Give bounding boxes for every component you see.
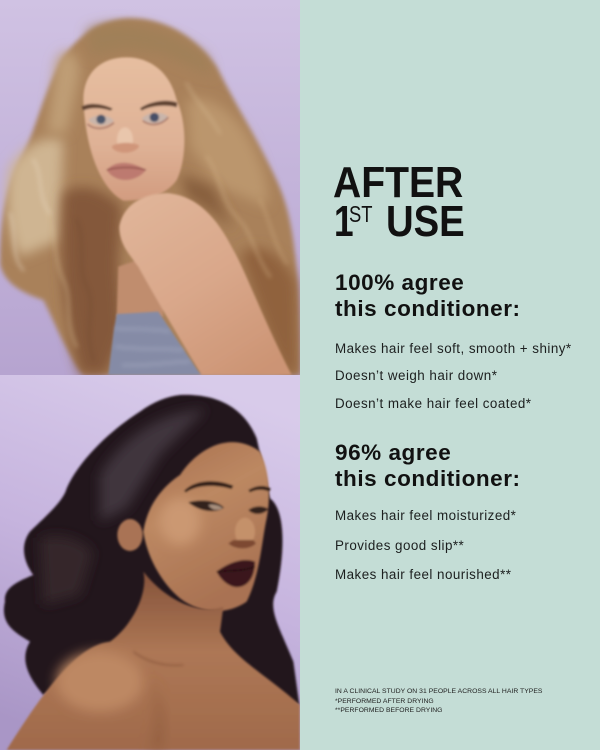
heading: 96% agree: 96% agree [335,440,451,465]
list: 100% agree claims: Makes hair feel soft, smooth + shiny* [335,341,572,356]
dark hair mass [4,395,299,705]
list: 100% agree claims: Doesn’t make hair feel coated* [335,396,531,411]
heading: 100% agree [335,270,521,320]
blonde hair mass [0,18,300,375]
title: 1 [334,197,354,246]
dark-haired woman face [117,442,271,611]
title: AFTER [333,158,463,207]
silver satin top [108,312,201,375]
footnote: IN A CLINICAL STUDY ON 31 PEOPLE ACROSS ALL HAIR TYPES [335,688,542,695]
photo: woman with wavy blonde hair [0,0,300,375]
title [333,158,465,246]
list: 100% agree claims [335,341,572,411]
title: USE [386,197,465,246]
heading: 100% agree: this conditioner: [335,296,521,320]
list: 100% agree claims: Doesn’t weigh hair down* [335,368,497,383]
heading: 96% agree [335,440,521,490]
footnote: *PERFORMED AFTER DRYING [335,698,434,704]
panel: after first use results [300,0,600,750]
list: 96% agree claims: Makes hair feel nourished** [335,567,511,582]
title: ST [349,201,373,227]
heading: 100% agree: 100% agree [335,270,464,295]
shoulder and arm [117,193,292,375]
neck and shoulders [7,572,300,750]
blonde woman face [82,57,184,201]
photo: woman with dark voluminous hair [0,375,300,750]
list: 96% agree claims: Makes hair feel moisturized* [335,508,516,523]
footnote: **PERFORMED BEFORE DRYING [335,707,443,714]
list: 96% agree claims: Provides good slip** [335,538,464,553]
heading: 96% agree: this conditioner: [335,466,521,490]
list: 96% agree claims [335,508,516,582]
footnote [335,688,542,714]
